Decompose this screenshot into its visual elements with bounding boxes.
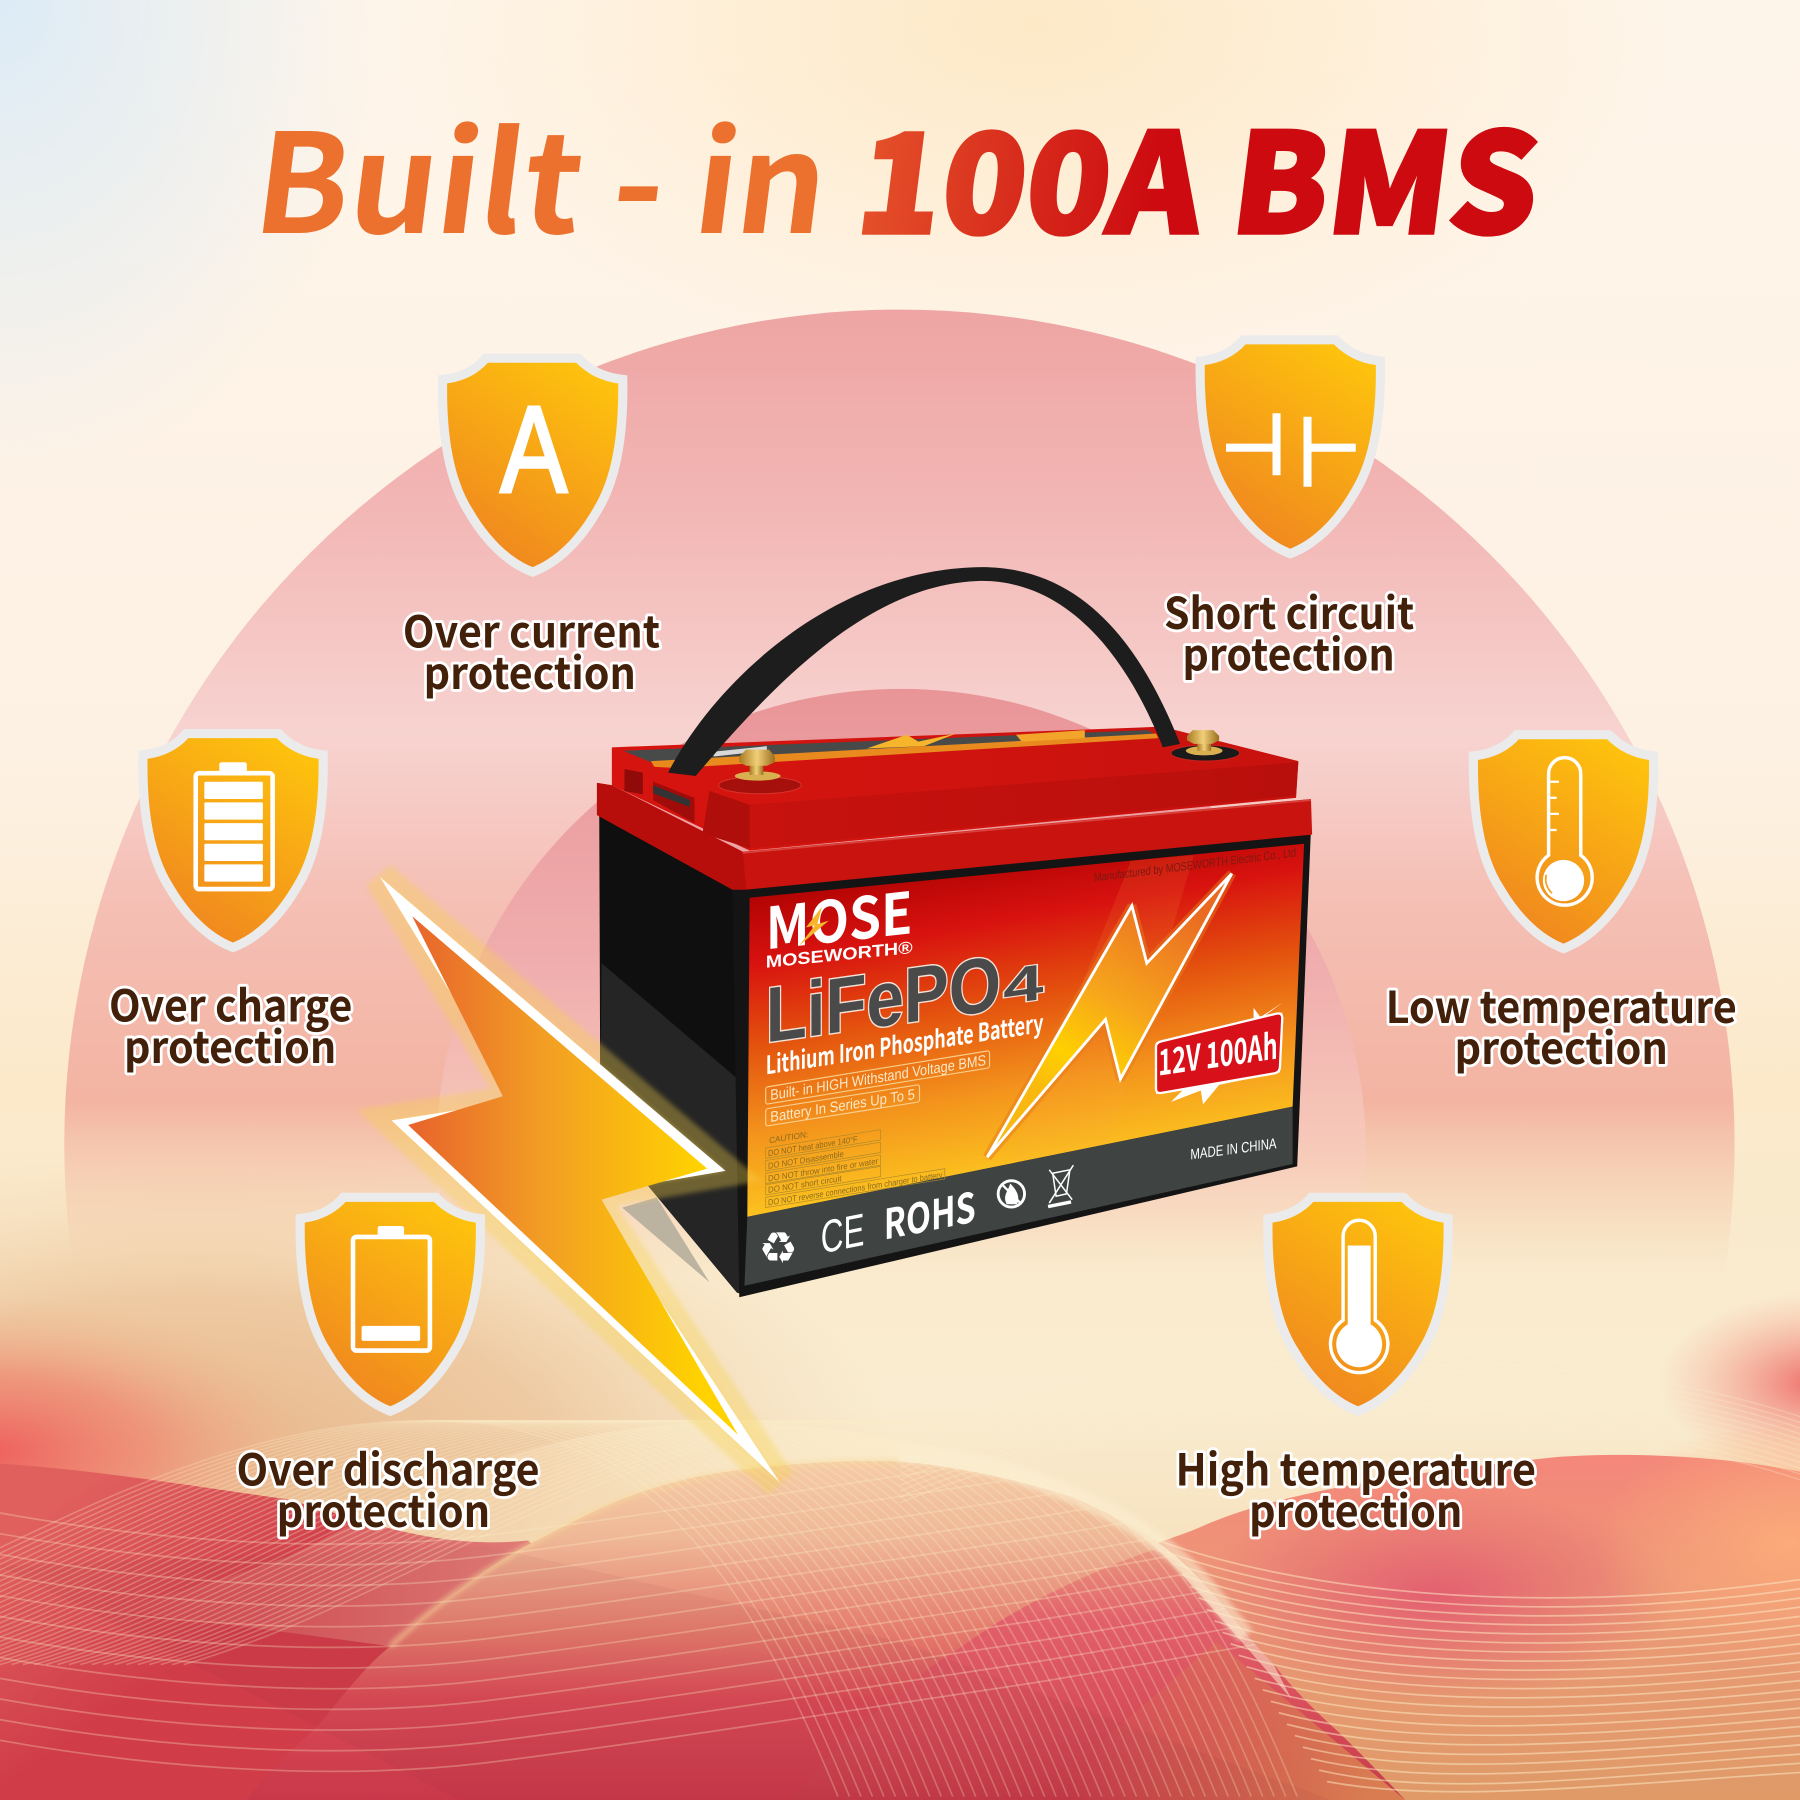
- icon: capacitor: [1226, 413, 1356, 487]
- label: protection: [1182, 619, 1395, 683]
- CE mark: CE: [821, 1203, 864, 1263]
- bolt fill: [408, 916, 738, 1435]
- WEEE icon: [1048, 1165, 1073, 1207]
- battery handle: [668, 567, 1180, 776]
- label: protection: [424, 638, 636, 702]
- shield: [1478, 739, 1649, 944]
- caution list: DO NOT short circuit: [768, 1173, 842, 1195]
- bolt outline: [380, 877, 779, 1482]
- battery lid: [597, 727, 1312, 890]
- logo: MOSE: [766, 866, 913, 966]
- caution list: [766, 1129, 945, 1208]
- title: Built - in: [245, 74, 841, 273]
- positive terminal: [719, 750, 801, 794]
- BMS feature box: Built- in HIGH Withstand Voltage BMS: [770, 1052, 986, 1104]
- label subtitle: Lithium Iron Phosphate Battery: [766, 1004, 1044, 1082]
- feature: over charge: [109, 738, 352, 1076]
- logo: MOSEWORTH®: [766, 937, 913, 972]
- shield: [305, 1202, 476, 1406]
- label grey strip: [744, 1107, 1293, 1286]
- icon: low battery: [353, 1226, 430, 1351]
- feature: high temperature: [1176, 1202, 1536, 1540]
- icon: ampere: A: [501, 381, 567, 518]
- caution list: DO NOT Disassemble: [768, 1149, 844, 1171]
- battery front face: [732, 829, 1311, 1297]
- icon: cold thermometer: [1537, 758, 1592, 905]
- label: Short circuit: [1164, 578, 1414, 642]
- capacity badge: 12V 100Ah: [1158, 1019, 1278, 1087]
- bottom waves: [0, 1353, 1800, 1800]
- icon: full battery: [196, 762, 273, 889]
- title: [245, 74, 1552, 273]
- feature: short circuit: [1164, 344, 1414, 683]
- bolt glow: [380, 877, 779, 1482]
- negative terminal: [1171, 730, 1240, 761]
- LiFePO4: LiFePO: [766, 939, 1001, 1059]
- LiFePO4: 4: [1003, 953, 1043, 1015]
- label: Over current: [403, 596, 660, 660]
- label manufacturer text: Manufactured by MOSEWORTH Electric Co., Ltd: [1094, 845, 1296, 885]
- battery: [597, 567, 1312, 1297]
- made in china: MADE IN CHINA: [1190, 1135, 1277, 1163]
- label: protection: [277, 1476, 490, 1540]
- inner semicircle: [436, 689, 1366, 1251]
- bolt shadow: [622, 1197, 709, 1282]
- series feature box: Battery In Series Up To 5: [770, 1086, 915, 1126]
- recycle icon: ♻: [759, 1224, 798, 1274]
- feature: low temperature: [1386, 739, 1737, 1077]
- caution list: DO NOT throw into fire or water: [768, 1156, 878, 1183]
- label: Low temperature: [1386, 972, 1737, 1036]
- label lightning bolt: [987, 874, 1232, 1157]
- caution list: DO NOT heat above 140°F: [768, 1134, 858, 1158]
- icon: hot thermometer: [1330, 1220, 1388, 1373]
- shield: [1272, 1202, 1444, 1406]
- label: High temperature: [1176, 1434, 1536, 1498]
- ROHS mark: ROHS: [884, 1175, 976, 1253]
- shield: [147, 738, 319, 942]
- label: protection: [124, 1012, 336, 1076]
- label: Over charge: [109, 971, 352, 1035]
- battery left face: [599, 813, 747, 1295]
- caution list: DO NOT reverse connections from charger to battery: [768, 1170, 943, 1208]
- feature: over discharge: [236, 1202, 540, 1540]
- title: 100A BMS: [848, 74, 1552, 273]
- lightning bolt: [380, 877, 779, 1482]
- feature: over current: [403, 363, 660, 702]
- caution list: CAUTION:: [769, 1129, 808, 1145]
- label: Over discharge: [236, 1434, 540, 1498]
- label: protection: [1249, 1476, 1462, 1540]
- capacity badge: [1156, 1002, 1283, 1104]
- shield: [1205, 344, 1376, 549]
- battery label: [747, 844, 1304, 1217]
- label: protection: [1454, 1013, 1668, 1077]
- no fire icon: [998, 1181, 1025, 1207]
- outer semicircle: [64, 310, 1735, 1274]
- shield: [447, 363, 618, 567]
- label light strip: [1010, 855, 1194, 1165]
